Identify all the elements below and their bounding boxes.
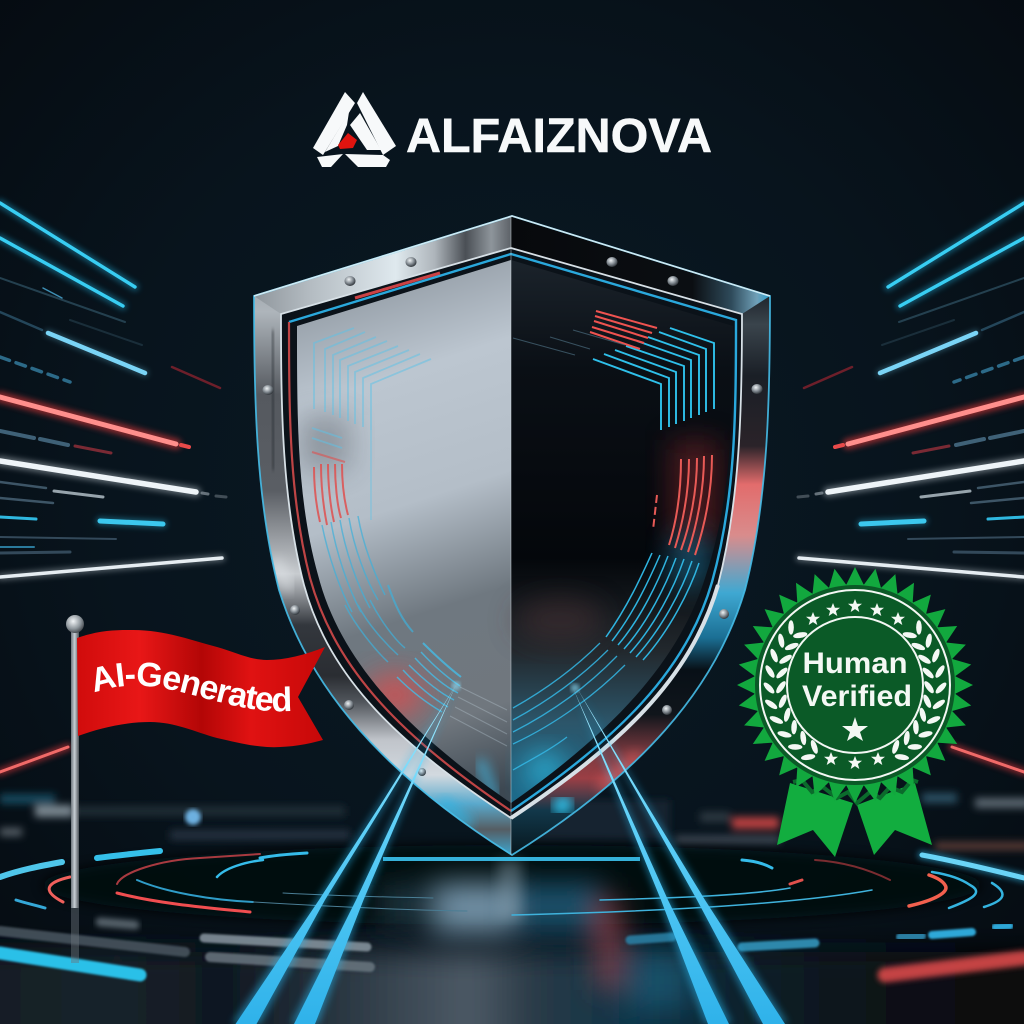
green badge: Human Verified: Verified [802, 680, 912, 713]
light beams [232, 682, 788, 1024]
circuit lines: bottom left [397, 643, 461, 712]
shield rivets [262, 257, 762, 776]
circuit lines: right faint [513, 330, 625, 355]
shield frame edge lines [254, 216, 770, 855]
circuit lines: left lower cyan [322, 516, 413, 662]
circuit lines: left mirrored [312, 328, 431, 520]
shield centre seam [510, 216, 512, 855]
circuit lines: right lower cyan [606, 553, 699, 660]
ribbon tails [777, 783, 932, 857]
badge centre star [842, 717, 868, 741]
shield top highlight [254, 216, 770, 296]
logo [313, 92, 712, 167]
starburst seal [724, 554, 986, 816]
ribbon zigzag shadow [793, 780, 918, 803]
circuit lines: right red [653, 455, 712, 555]
floor glow band [383, 854, 640, 864]
circuit lines: left red [312, 452, 348, 525]
speed lines: right [798, 203, 1024, 772]
floor rings [0, 851, 1024, 915]
shield glass: right half [511, 255, 741, 810]
laurel wreath [762, 617, 948, 767]
logo mark [313, 92, 396, 167]
shield inner bevel [281, 248, 742, 818]
floor platform [0, 793, 1024, 1024]
speed lines: left [0, 203, 226, 772]
shield [250, 210, 773, 860]
circuit lines: bottom right [513, 643, 625, 770]
circuit lines: right top red [590, 311, 657, 349]
shield outer frame: left half [250, 210, 512, 860]
circuit lines: bottom left faint [450, 687, 507, 746]
green badge: Human Verified [724, 554, 986, 857]
logo wordmark: ALFAIZNOVA [406, 110, 712, 163]
badge text: Human [802, 647, 908, 680]
circuit lines: right top cyan [593, 328, 714, 430]
shield outer frame: right half [511, 210, 773, 860]
shield bevel accents [289, 254, 736, 818]
shield glass: left half [290, 255, 511, 810]
flag pole [66, 615, 84, 963]
red flag: AI-Generated [77, 630, 325, 748]
floor light streaks [0, 922, 1024, 975]
ring stars [806, 599, 905, 769]
flag label: AI-Generated [94, 662, 290, 712]
